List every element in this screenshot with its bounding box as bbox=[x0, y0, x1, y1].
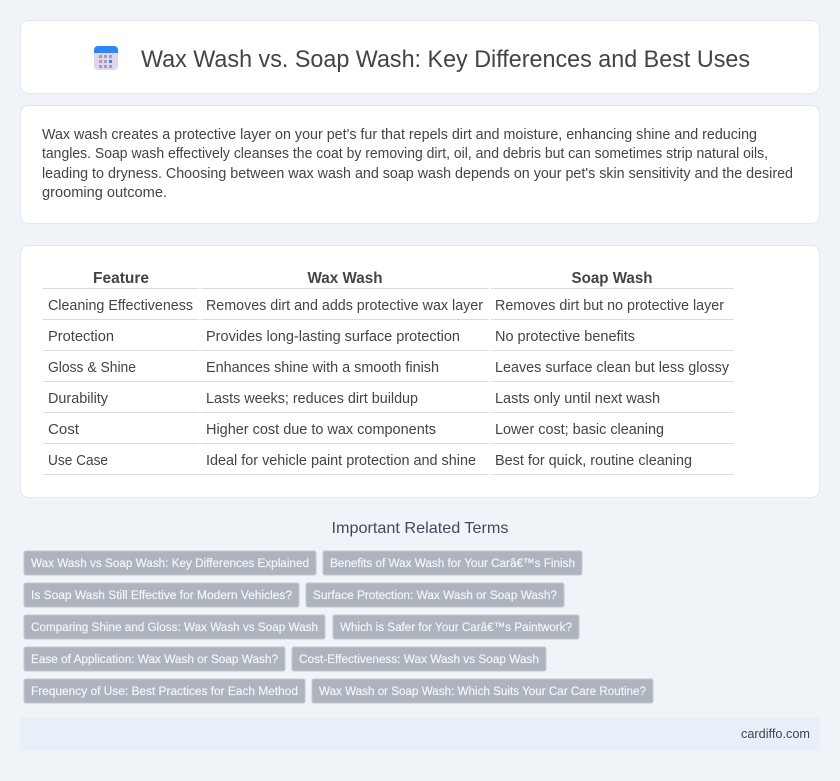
tag bbox=[292, 647, 546, 671]
row: cleaning effectiveness: Removes dirt and adds protective wax layer bbox=[206, 298, 483, 314]
row: cost bbox=[43, 422, 734, 444]
text block: introduction: leading to dryness. Choosing between wax wash and soap wash depends on your pet's skin sensitivity and the desired bbox=[42, 166, 793, 182]
table header bbox=[43, 270, 734, 288]
tag bbox=[312, 679, 653, 703]
row: gloss and shine: Enhances shine with a smooth finish bbox=[206, 360, 439, 376]
footer source: cardiffo.com bbox=[741, 727, 810, 741]
row: durability: Lasts only until next wash bbox=[495, 391, 660, 407]
tag bbox=[24, 679, 305, 703]
row: cleaning effectiveness: Removes dirt but no protective layer bbox=[495, 298, 724, 314]
row: use case: Use Case bbox=[48, 453, 108, 469]
table header: Wax Wash bbox=[308, 270, 382, 287]
table header: Soap Wash bbox=[572, 270, 652, 287]
row: use case: Ideal for vehicle paint protection and shine bbox=[206, 453, 476, 469]
tag bbox=[306, 583, 564, 607]
tag: Comparing Shine and Gloss: Wax Wash vs Soap Wash bbox=[31, 620, 318, 634]
row: cleaning effectiveness: Cleaning Effectiveness bbox=[48, 298, 193, 314]
row: protection: Provides long-lasting surface protection bbox=[206, 329, 460, 345]
tag: Benefits of Wax Wash for Your Carâ€™s Finish bbox=[330, 556, 575, 570]
tag bbox=[24, 615, 325, 639]
row: cost: Lower cost; basic cleaning bbox=[495, 422, 664, 438]
tag: Frequency of Use: Best Practices for Each Method bbox=[31, 684, 298, 698]
row: cost: Higher cost due to wax components bbox=[206, 422, 436, 438]
text block: introduction bbox=[42, 127, 793, 201]
icon: calendar bbox=[94, 46, 118, 70]
tag bbox=[24, 551, 316, 575]
row: protection bbox=[43, 329, 734, 350]
text block: introduction: grooming outcome. bbox=[42, 185, 167, 201]
text block: introduction: tangles. Soap wash effectively cleanses the coat by removing dirt, oil, and debris but can sometimes strip natural oils, bbox=[42, 146, 768, 162]
related term tags bbox=[24, 551, 653, 703]
row: gloss and shine: Gloss & Shine bbox=[48, 360, 136, 376]
table header: Feature bbox=[93, 270, 149, 287]
row: cost: Cost bbox=[48, 422, 79, 438]
text block: introduction: Wax wash creates a protective layer on your pet's fur that repels dirt and moisture, enhancing shine and reducing bbox=[42, 127, 757, 143]
panel: introduction bbox=[20, 106, 820, 224]
tag: Surface Protection: Wax Wash or Soap Wash? bbox=[313, 588, 557, 602]
row: durability: Lasts weeks; reduces dirt buildup bbox=[206, 391, 418, 407]
tag: Is Soap Wash Still Effective for Modern Vehicles? bbox=[31, 588, 292, 602]
row: protection: No protective benefits bbox=[495, 329, 635, 345]
tag: Wax Wash vs Soap Wash: Key Differences Explained bbox=[31, 556, 309, 570]
row: durability bbox=[43, 391, 734, 412]
row: protection: Protection bbox=[48, 329, 114, 345]
tag bbox=[24, 583, 299, 607]
tag: Which is Safer for Your Carâ€™s Paintwork? bbox=[340, 620, 572, 634]
title: Wax Wash vs. Soap Wash: Key Differences and Best Uses bbox=[141, 46, 750, 73]
row: cleaning effectiveness bbox=[43, 298, 734, 320]
row: durability: Durability bbox=[48, 391, 109, 407]
panel: comparison table bbox=[20, 246, 820, 498]
panel: header bbox=[20, 20, 820, 94]
row: use case: Best for quick, routine cleaning bbox=[495, 453, 692, 469]
row: use case bbox=[43, 453, 734, 474]
heading: important related terms: Important Related Terms bbox=[332, 520, 508, 537]
tag: Cost-Effectiveness: Wax Wash vs Soap Wash bbox=[299, 652, 539, 666]
row: gloss and shine: Leaves surface clean but less glossy bbox=[495, 360, 730, 376]
tag bbox=[333, 615, 579, 639]
row: gloss and shine bbox=[43, 360, 734, 382]
tag: Ease of Application: Wax Wash or Soap Wash? bbox=[31, 652, 278, 666]
tag bbox=[323, 551, 582, 575]
tag: Wax Wash or Soap Wash: Which Suits Your Car Care Routine? bbox=[319, 684, 646, 698]
tag bbox=[24, 647, 285, 671]
footer bbox=[20, 717, 820, 751]
